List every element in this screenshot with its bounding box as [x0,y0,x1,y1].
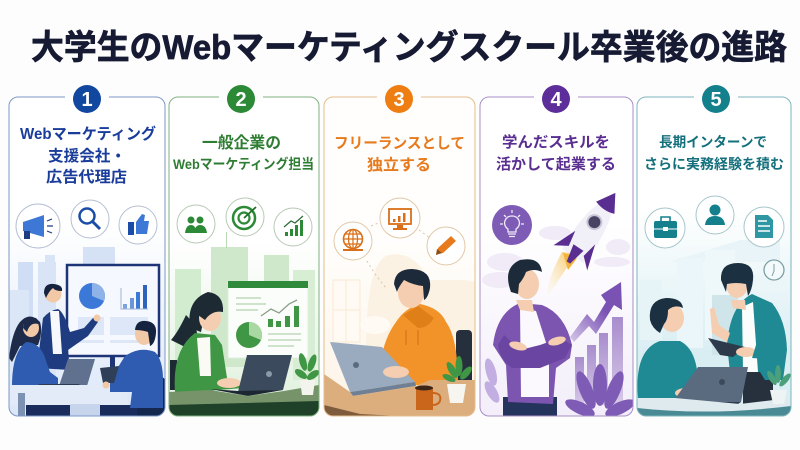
panel 3 number badge [377,85,421,113]
panel 4 heading: 活かして起業する [496,155,616,173]
panel 4 heading: 学んだスキルを [502,133,610,151]
panel 3 illustration [324,222,475,416]
panel 1 number badge [65,85,109,113]
icon: lightbulb [492,205,532,245]
panel 5 illustration [637,240,792,416]
panel 1 heading: 広告代理店 [46,168,127,186]
icon: globe [334,222,372,260]
panel 4 background [480,97,633,416]
panel 4 illustration [482,181,637,420]
panel 4 number badge: 4 [550,89,562,111]
panel 2 frame [169,97,319,416]
panel 4 frame [480,97,633,416]
panel: 4 startup [480,85,637,420]
panel 1 background [9,97,165,416]
icon: person [696,196,734,234]
panel 1 heading: Webマーケティング [20,124,156,143]
panel 5 number badge [694,85,738,113]
icon: monitor chart [380,198,420,238]
panel 5 heading: さらに実務経験を積む [644,156,784,172]
panel 2 heading: Webマーケティング担当 [173,156,314,172]
panel 1 heading: 支援会社・ [48,147,126,165]
icon: briefcase [645,208,685,248]
icon: target [226,198,264,236]
panel 3 heading: フリーランスとして [334,135,465,152]
panel: 1 marketing agency [9,85,165,417]
icon: pencil [427,227,465,265]
panel: 2 in-house marketing [169,85,321,416]
panel 5 frame [637,97,791,416]
panel 4 number badge [534,85,578,113]
icon: thumbs up [119,206,157,244]
panel: 3 freelance [324,85,475,416]
panel 1 number badge: 1 [81,89,93,111]
panel 3 background [324,97,475,416]
panel: 5 internship [637,85,792,416]
panel 1 illustration [9,247,165,417]
icon: magnifier [71,200,109,238]
panel 2 illustration [169,232,321,416]
panel 2 heading: 一般企業の [202,133,281,152]
title: 大学生のWebマーケティングスクール卒業後の進路 [31,29,787,67]
icon: people [177,205,215,243]
icon: megaphone [16,204,60,248]
icon: growth chart [274,208,312,246]
panel 3 number badge: 3 [393,89,405,111]
panel 2 number badge [219,85,263,113]
panel 3 heading: 独立する [367,156,431,174]
panel 2 background [169,97,319,416]
icon: document [744,207,784,247]
panel 1 frame [9,97,165,416]
panel 2 number badge: 2 [235,89,247,111]
panel 3 frame [324,97,475,416]
panel 5 heading: 長期インターンで [659,134,767,150]
panel 5 background [637,97,791,416]
panel 5 number badge: 5 [710,89,722,111]
